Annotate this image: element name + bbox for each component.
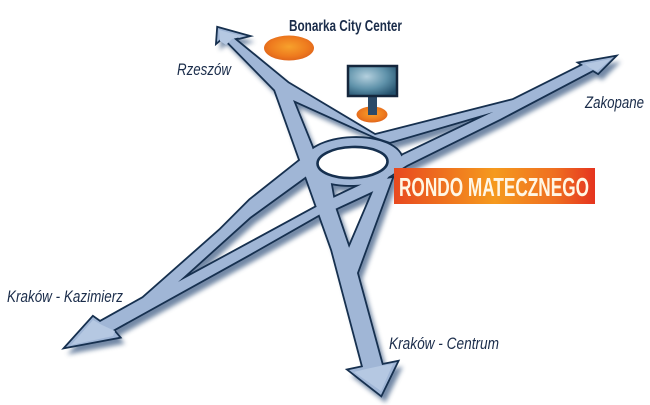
- arrowhead: Rzeszów: [219, 30, 243, 45]
- icon: billboard on orange base: [348, 66, 397, 122]
- road network with five arrows and roundabout: [66, 28, 618, 401]
- banner: Rondo Matecznego: [394, 168, 595, 204]
- label: Kraków - Centrum: Kraków - Centrum: [389, 334, 499, 353]
- Bonarka City Center marker: [264, 36, 314, 60]
- label: Kraków - Kazimierz: Kraków - Kazimierz: [7, 287, 123, 306]
- arrowhead: Kraków - Kazimierz: [71, 320, 115, 345]
- arrowhead: Kraków - Centrum: [354, 364, 393, 391]
- roundabout centre island: [317, 146, 388, 179]
- Bonarka City Center label: Bonarka City Center: [289, 18, 402, 35]
- label: Rzeszów: Rzeszów: [177, 60, 232, 79]
- arrowhead: Zakopane: [585, 59, 611, 71]
